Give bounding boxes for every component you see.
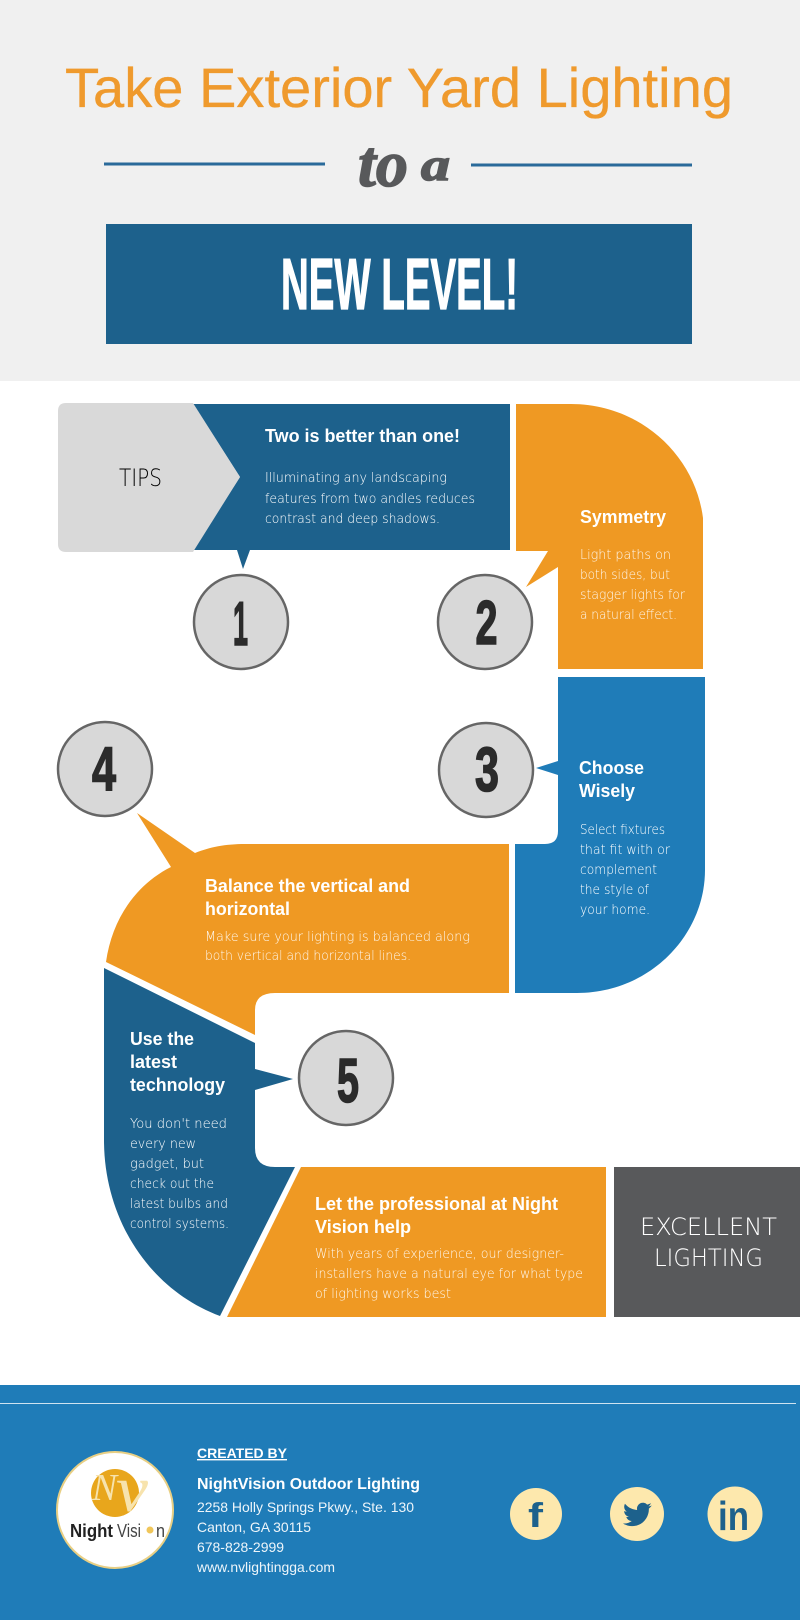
icon: linkedin <box>708 1486 762 1542</box>
title: Take Exterior Yard Lighting <box>65 56 733 119</box>
badge 2 <box>438 575 532 669</box>
script subtitle: to <box>358 128 408 201</box>
body text <box>265 471 475 527</box>
body text: features from two andles reduces <box>265 492 475 507</box>
heading: Two is better than one! <box>265 426 460 446</box>
left rule <box>104 162 325 166</box>
script subtitle: a <box>421 139 450 190</box>
footer panel <box>0 1385 800 1620</box>
icon: facebook: f <box>528 1497 544 1535</box>
body text: Illuminating any landscaping <box>265 471 447 486</box>
icon: facebook <box>510 1488 562 1540</box>
panel: tip 4 <box>106 813 509 1035</box>
logo: v <box>116 1453 149 1526</box>
body text: check out the <box>130 1177 214 1192</box>
heading: technology <box>130 1075 225 1095</box>
heading <box>579 758 644 801</box>
heading <box>130 1029 225 1095</box>
badge 5: 5 <box>337 1047 359 1116</box>
heading: Balance the vertical and <box>205 876 410 896</box>
panel: tip 6 <box>227 1167 606 1317</box>
heading: Choose <box>579 758 644 778</box>
contact details: 2258 Holly Springs Pkwy., Ste. 130 <box>197 1499 414 1515</box>
body text: of lighting works best <box>315 1287 451 1302</box>
heading: Vision help <box>315 1217 411 1237</box>
heading <box>205 876 410 919</box>
badge 2: 2 <box>476 589 498 658</box>
badge 4 <box>58 722 152 816</box>
body text: that fit with or <box>580 843 671 858</box>
panel: tip 3 <box>515 677 705 993</box>
contact details <box>196 1445 420 1575</box>
body text: Light paths on <box>580 548 671 563</box>
right rule <box>471 164 692 166</box>
heading: Wisely <box>579 781 635 801</box>
logo: N <box>91 1467 120 1509</box>
badge 1 <box>194 575 288 669</box>
heading: Symmetry <box>580 507 666 527</box>
body text: Make sure your lighting is balanced along <box>205 930 470 945</box>
body text: complement <box>580 863 657 878</box>
heading <box>315 1194 558 1237</box>
body text <box>580 823 671 918</box>
contact details: www.nvlightingga.com <box>196 1559 335 1575</box>
panel: tips label: TIPS <box>119 464 162 492</box>
badge 4: 4 <box>92 735 116 804</box>
icon: linkedin: in <box>718 1493 749 1539</box>
contact details: 678-828-2999 <box>197 1539 284 1555</box>
body text: You don't need <box>130 1117 227 1132</box>
banner <box>106 224 692 344</box>
logo <box>57 1452 173 1568</box>
heading: horizontal <box>205 899 290 919</box>
body text: gadget, but <box>130 1157 204 1172</box>
icon: twitter <box>610 1487 664 1541</box>
badge 5 <box>299 1031 393 1125</box>
body text: the style of <box>580 883 649 898</box>
body text <box>205 930 470 964</box>
badge 3: 3 <box>475 736 499 805</box>
body text <box>130 1117 229 1232</box>
panel: tip 5 <box>104 968 295 1316</box>
body text: stagger lights for <box>580 588 686 603</box>
body text: a natural effect. <box>580 608 677 623</box>
badge 3 <box>439 723 533 817</box>
panel: tip 2 <box>516 404 703 669</box>
badge 1: 1 <box>233 590 248 659</box>
body text: Select fixtures <box>580 823 665 838</box>
body text: both sides, but <box>580 568 670 583</box>
panel: tips label <box>58 403 240 552</box>
panel: excellent lighting: EXCELLENT <box>640 1213 777 1241</box>
body text: With years of experience, our designer- <box>315 1247 564 1262</box>
panel: tip 1 <box>193 404 510 569</box>
header panel <box>0 0 800 381</box>
logo: Night <box>70 1521 113 1541</box>
body text <box>315 1247 583 1302</box>
body text: latest bulbs and <box>130 1197 228 1212</box>
body text: your home. <box>580 903 650 918</box>
banner: NEW LEVEL! <box>281 245 518 325</box>
logo: n <box>156 1521 165 1541</box>
contact details: NightVision Outdoor Lighting <box>197 1476 420 1493</box>
panel: excellent lighting: LIGHTING <box>654 1244 763 1272</box>
body text: installers have a natural eye for what type <box>315 1267 583 1282</box>
body text: every new <box>130 1137 196 1152</box>
body text: both vertical and horizontal lines. <box>205 949 411 964</box>
contact details: Canton, GA 30115 <box>197 1519 311 1535</box>
contact details: CREATED BY <box>197 1445 288 1461</box>
heading: latest <box>130 1052 177 1072</box>
heading: Let the professional at Night <box>315 1194 558 1214</box>
body text <box>580 548 686 623</box>
body text: control systems. <box>130 1217 229 1232</box>
script subtitle <box>358 128 450 201</box>
heading: Use the <box>130 1029 194 1049</box>
panel: excellent lighting <box>614 1167 800 1317</box>
body text: contrast and deep shadows. <box>265 512 440 527</box>
logo: Visi <box>117 1521 141 1541</box>
